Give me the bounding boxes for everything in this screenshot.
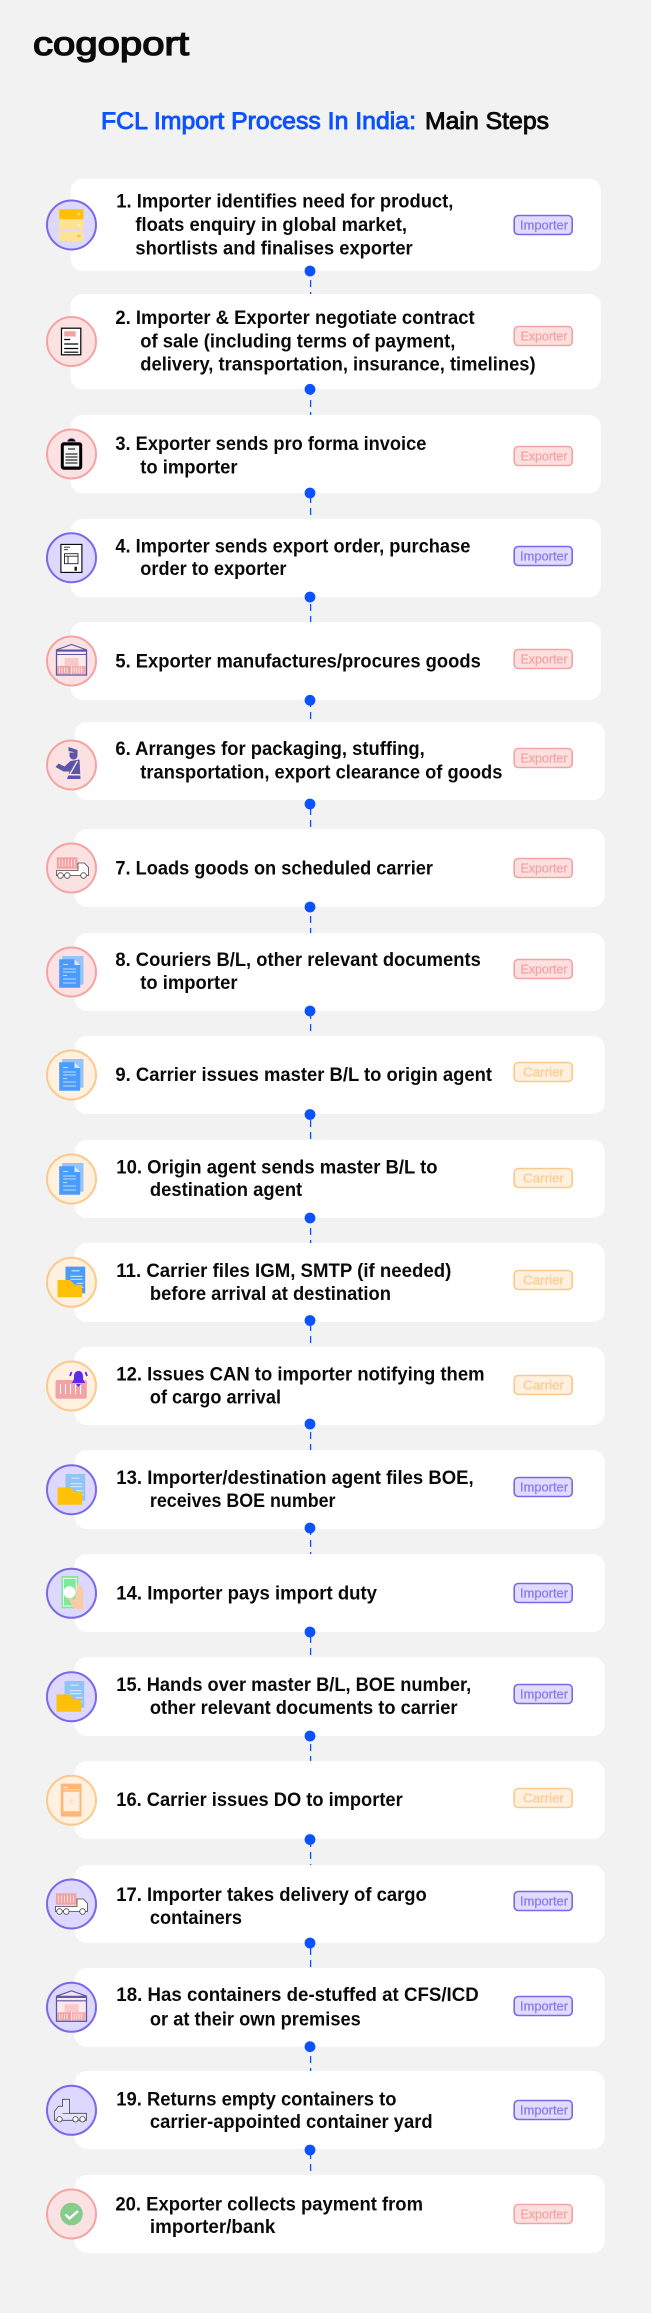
dot — [305, 488, 315, 498]
badge: Exporter — [514, 748, 572, 768]
icon: filing cabinet — [47, 200, 96, 250]
badge: Exporter — [514, 858, 572, 878]
icon: delivery order — [47, 1776, 96, 1825]
dot — [305, 1938, 315, 1948]
step 10 — [47, 1140, 605, 1223]
text 18: 18. Has containers de-stuffed at CFS/ICD — [116, 1984, 479, 2006]
badge: Importer: Importer — [520, 1480, 568, 1494]
text 9: 9. Carrier issues master B/L to origin agent — [115, 1064, 492, 1086]
badge: Importer: Importer — [520, 1688, 568, 1702]
logo: cogoport — [33, 25, 189, 62]
icon: document — [47, 317, 96, 366]
text 6 — [115, 738, 502, 783]
title: FCL Import Process In India: — [101, 108, 416, 135]
step 12 — [47, 1347, 605, 1429]
badge: Importer: Importer — [520, 550, 568, 564]
text 13: receives BOE number — [150, 1490, 336, 1512]
step 3 — [47, 415, 601, 498]
icon: loaded truck — [47, 1880, 96, 1928]
connector dashed line — [310, 280, 312, 2253]
icon: warehouse — [47, 1983, 96, 2032]
badge: Carrier: Carrier — [523, 1378, 564, 1392]
badge: Carrier — [514, 1270, 572, 1290]
text 16: 16. Carrier issues DO to importer — [116, 1789, 403, 1811]
badge: Carrier: Carrier — [523, 1172, 564, 1186]
dot — [305, 2145, 315, 2155]
card 13 — [75, 1450, 605, 1529]
icon: documents — [47, 1050, 96, 1100]
dot — [305, 1213, 315, 1223]
icon: warehouse — [47, 636, 96, 686]
card 10 — [75, 1140, 605, 1218]
text 1: shortlists and finalises exporter — [135, 237, 413, 259]
text 14: 14. Importer pays import duty — [116, 1582, 377, 1604]
dot — [305, 1627, 315, 1637]
badge: Exporter: Exporter — [520, 330, 568, 344]
badge: Exporter: Exporter — [520, 752, 568, 766]
text 6: 6. Arranges for packaging, stuffing, — [115, 738, 425, 760]
badge: Carrier — [514, 1788, 572, 1808]
card 20 — [75, 2175, 605, 2253]
step 15 — [47, 1657, 605, 1741]
step 4 — [47, 519, 601, 602]
text 18 — [116, 1984, 479, 2030]
step 16 — [47, 1761, 605, 1845]
dot — [305, 384, 315, 395]
badge: Exporter: Exporter — [520, 652, 568, 666]
text 19 — [116, 2088, 433, 2133]
step 5 — [47, 622, 601, 706]
text 20 — [115, 2193, 423, 2238]
dot — [305, 1006, 315, 1016]
icon: hand with banknote — [47, 1569, 96, 1618]
dot — [305, 695, 315, 706]
badge: Importer — [514, 546, 572, 566]
dot — [305, 1731, 315, 1741]
icon: container with bell — [47, 1362, 96, 1410]
text 8 — [115, 949, 481, 994]
text 8: to importer — [140, 972, 238, 994]
step 6 — [47, 722, 605, 809]
card 11 — [75, 1243, 605, 1322]
badge: Exporter: Exporter — [520, 450, 568, 464]
step 19 — [47, 2071, 605, 2155]
text 10 — [116, 1156, 438, 1201]
badge: Carrier: Carrier — [523, 1792, 564, 1806]
badge: Exporter — [514, 2204, 572, 2224]
text 15: other relevant documents to carrier — [150, 1697, 458, 1719]
card 18 — [75, 1968, 605, 2047]
step 13 — [47, 1450, 605, 1533]
badge: Importer: Importer — [520, 1586, 568, 1600]
text 20: importer/bank — [150, 2216, 275, 2238]
card 12 — [75, 1347, 605, 1425]
dot — [305, 1523, 315, 1533]
dot — [305, 1109, 315, 1120]
badge: Importer: Importer — [520, 2000, 568, 2014]
card 4 — [71, 519, 601, 597]
card 1 — [71, 179, 601, 271]
icon: clipboard — [47, 430, 96, 478]
badge: Importer — [514, 1478, 572, 1496]
dot — [305, 902, 315, 912]
step 20 — [47, 2175, 605, 2253]
badge: Exporter — [514, 446, 572, 466]
text 12 — [116, 1363, 485, 1408]
text 12: of cargo arrival — [150, 1386, 281, 1408]
icon: worker — [47, 740, 96, 790]
dot — [305, 1834, 315, 1845]
dot — [305, 2041, 315, 2052]
badge: Exporter — [514, 326, 572, 346]
badge: Exporter — [514, 650, 572, 668]
text 10: 10. Origin agent sends master B/L to — [116, 1156, 438, 1178]
text 3: to importer — [140, 456, 238, 478]
text 2: of sale (including terms of payment, — [140, 330, 455, 352]
text 2: delivery, transportation, insurance, timelines) — [140, 354, 536, 376]
text 11 — [116, 1260, 451, 1305]
text 13 — [116, 1467, 474, 1512]
icon: loaded truck — [47, 844, 96, 892]
step 11 — [47, 1243, 605, 1326]
card 2 — [71, 294, 601, 389]
card 6 — [75, 722, 605, 800]
text 13: 13. Importer/destination agent files BOE, — [116, 1467, 474, 1489]
badge: Importer: Importer — [520, 218, 568, 232]
text 18: or at their own premises — [150, 2008, 361, 2030]
text 17 — [116, 1884, 427, 1929]
dot — [305, 592, 315, 602]
text 11: 11. Carrier files IGM, SMTP (if needed) — [116, 1260, 451, 1282]
text 3: 3. Exporter sends pro forma invoice — [115, 433, 426, 455]
badge: Importer — [514, 1996, 572, 2016]
text 8: 8. Couriers B/L, other relevant documents — [115, 949, 481, 971]
badge: Exporter: Exporter — [520, 962, 568, 976]
text 1 — [116, 190, 453, 259]
icon: documents — [47, 948, 96, 996]
text 7: 7. Loads goods on scheduled carrier — [115, 857, 433, 879]
step 8 — [47, 933, 605, 1016]
text 4 — [115, 535, 470, 580]
text 19: 19. Returns empty containers to — [116, 2088, 397, 2110]
badge: Importer — [514, 1684, 572, 1704]
badge: Importer: Importer — [520, 1894, 568, 1908]
dot — [305, 1419, 315, 1429]
badge: Carrier — [514, 1376, 572, 1394]
text 4: 4. Importer sends export order, purchase — [115, 535, 470, 557]
text 2: 2. Importer & Exporter negotiate contract — [115, 307, 475, 329]
icon: empty truck — [47, 2086, 96, 2135]
card 7 — [75, 829, 605, 907]
dot — [305, 1315, 315, 1326]
card 19 — [75, 2071, 605, 2149]
text 15 — [116, 1674, 471, 1719]
step 2 — [47, 294, 601, 395]
text 2 — [115, 307, 536, 376]
icon: order form — [47, 533, 96, 582]
text 1: floats enquiry in global market, — [135, 214, 407, 236]
dot — [305, 799, 315, 809]
step 17 — [47, 1865, 605, 1948]
text 6: transportation, export clearance of goods — [140, 761, 502, 783]
card 16 — [75, 1761, 605, 1839]
text 19: carrier-appointed container yard — [150, 2111, 433, 2133]
title — [101, 108, 549, 135]
card 5 — [71, 622, 601, 700]
text 12: 12. Issues CAN to importer notifying them — [116, 1363, 485, 1385]
card 3 — [71, 415, 601, 493]
badge: Carrier — [514, 1062, 572, 1082]
icon: folder with sheet — [47, 1672, 96, 1721]
text 15: 15. Hands over master B/L, BOE number, — [116, 1674, 471, 1696]
card 17 — [75, 1865, 605, 1943]
step 18 — [47, 1968, 605, 2052]
card 15 — [75, 1657, 605, 1736]
badge: Carrier: Carrier — [523, 1066, 564, 1080]
title: Main Steps — [425, 108, 549, 135]
icon: documents — [47, 1154, 96, 1204]
icon: folder with sheet — [47, 1258, 96, 1307]
text 17: 17. Importer takes delivery of cargo — [116, 1884, 427, 1906]
badge: Importer — [514, 1584, 572, 1602]
step 9 — [47, 1036, 605, 1120]
text 3 — [115, 433, 426, 478]
badge: Exporter: Exporter — [520, 2208, 568, 2222]
text 11: before arrival at destination — [150, 1283, 391, 1305]
badge: Exporter — [514, 960, 572, 978]
badge: Importer — [514, 216, 572, 234]
badge: Importer: Importer — [520, 2104, 568, 2118]
badge: Importer — [514, 2100, 572, 2120]
badge: Exporter: Exporter — [520, 862, 568, 876]
text 20: 20. Exporter collects payment from — [115, 2193, 423, 2215]
badge: Carrier: Carrier — [523, 1274, 564, 1288]
step 7 — [47, 829, 605, 912]
badge: Carrier — [514, 1168, 572, 1188]
card 9 — [75, 1036, 605, 1114]
badge: Importer — [514, 1892, 572, 1910]
text 5: 5. Exporter manufactures/procures goods — [115, 650, 481, 672]
icon: check mark — [47, 2190, 96, 2238]
icon: folder with sheet — [47, 1465, 96, 1514]
step 1 — [47, 179, 601, 276]
card 14 — [75, 1554, 605, 1632]
text 1: 1. Importer identifies need for product, — [116, 190, 453, 212]
text 10: destination agent — [150, 1179, 303, 1201]
step 14 — [47, 1554, 605, 1637]
text 17: containers — [150, 1907, 242, 1929]
card 8 — [75, 933, 605, 1011]
text 4: order to exporter — [140, 558, 287, 580]
dot — [305, 266, 315, 276]
